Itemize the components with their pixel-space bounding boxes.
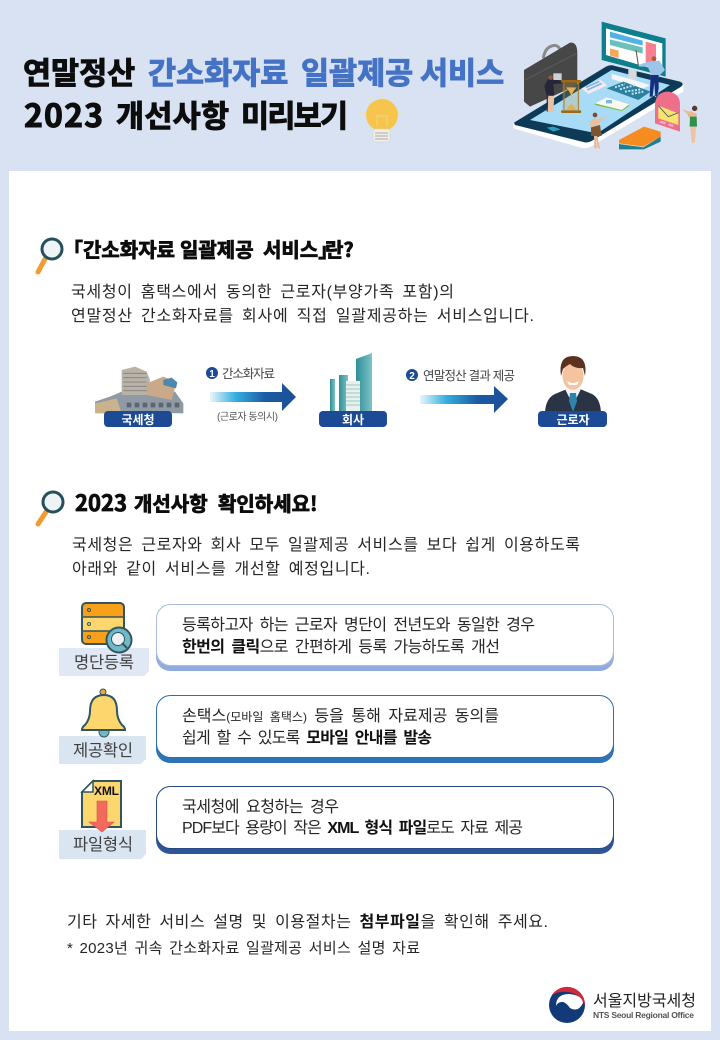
footer note [67, 913, 548, 957]
intro text 2: 아래와 같이 서비스를 개선할 예정입니다. [72, 560, 370, 578]
monitor [628, 68, 637, 83]
item 1: 명단등록 [59, 603, 614, 676]
title: 서비스 [420, 49, 504, 93]
hourglass [562, 83, 580, 112]
description card: PDF보다 용량이 작은 XML 형식 파일로도 자료 제공 [182, 819, 523, 837]
tablet [513, 67, 683, 148]
description card: 한번의 클릭으로 간편하게 등록 가능하도록 개선 [182, 638, 500, 656]
logo: Seoul Regional Office: NTS Seoul Regional Office [593, 1010, 694, 1020]
briefcase [543, 45, 561, 58]
consent note: (근로자 동의시) [217, 411, 278, 423]
books [619, 127, 661, 147]
section heading 1 [38, 234, 354, 272]
description card: 쉽게 할 수 있도록 모바일 안내를 발송 [182, 729, 432, 747]
title: 일괄제공 [301, 49, 413, 93]
papers [582, 79, 607, 94]
item 2: 제공확인 [59, 689, 614, 764]
step 2 label: 연말정산 결과 제공 [423, 369, 515, 383]
heading text: 서비스」 [263, 234, 338, 263]
arrow 2 [420, 386, 508, 413]
label tag [59, 736, 146, 764]
label tag: 제공확인 [73, 741, 133, 760]
person: 근로자 [545, 356, 601, 412]
intro text 1 [71, 283, 534, 325]
heading text: 일괄제공 [180, 234, 254, 263]
arrow 1 [210, 383, 296, 411]
step 1 label: 1 [209, 369, 215, 380]
title: 간소화자료 [148, 49, 288, 93]
woman at right [692, 106, 697, 111]
icon: magnifier [38, 239, 62, 272]
description card [156, 604, 614, 671]
tag: 근로자: 근로자 [556, 413, 590, 427]
heading text: 확인하세요! [218, 488, 317, 517]
illustration: tablet, monitor and office items [513, 22, 697, 149]
heading text: 개선사항 [134, 488, 208, 517]
icon: magnifier [38, 492, 63, 524]
footer note: * 2023년 귀속 간소화자료 일괄제공 서비스 설명 자료 [67, 940, 420, 957]
heading text: 2023 [75, 486, 127, 518]
woman at bottom [593, 113, 597, 117]
icon: XML file with arrow [82, 781, 121, 832]
title: 개선사항 [116, 92, 229, 136]
heading text: 란? [325, 234, 354, 263]
tag: 국세청 [104, 411, 172, 427]
footer note: 기타 자세한 서비스 설명 및 이용절차는 첨부파일을 확인해 주세요. [67, 913, 548, 931]
logo: Seoul Regional Office: 서울지방국세청 [593, 992, 696, 1010]
label tag: 명단등록 [74, 653, 134, 672]
emblem [549, 987, 585, 1023]
label tag [59, 648, 149, 676]
man with pointer [636, 50, 638, 65]
tag: 회사: 회사 [342, 413, 364, 427]
label tag [59, 830, 146, 859]
title: 2023 [24, 91, 103, 137]
item 3: 파일형식 [59, 781, 614, 859]
icon: database with magnifier [82, 603, 132, 652]
intro text 2 [72, 536, 580, 578]
step 2 label: 2 [409, 371, 415, 382]
intro text 2: 국세청은 근로자와 회사 모두 일괄제공 서비스를 보다 쉽게 이용하도록 [72, 536, 580, 554]
flow diagram [95, 353, 607, 427]
description card: 등록하고자 하는 근로자 명단이 전년도와 동일한 경우 [182, 616, 535, 634]
title: 연말정산 [23, 49, 135, 93]
book [595, 97, 629, 110]
tag: 회사 [319, 411, 387, 427]
tag: 근로자 [538, 411, 607, 427]
title: 미리보기 [241, 92, 348, 136]
pink clock [655, 92, 680, 132]
step 1 label: 간소화자료 [222, 367, 275, 381]
description card [156, 786, 614, 854]
logo: Seoul Regional Office [549, 987, 696, 1023]
label tag: 파일형식 [73, 835, 133, 854]
woman at briefcase [544, 78, 563, 112]
building: 국세청 [95, 367, 183, 413]
tag: 국세청: 국세청 [121, 412, 155, 427]
icon: bell [82, 689, 125, 737]
icon: light bulb [360, 93, 404, 142]
description card: 국세청에 요청하는 경우 [182, 798, 339, 816]
icon: XML file with arrow: XML [94, 784, 119, 798]
heading text: 「간소화자료 [63, 234, 175, 263]
building: 회사 [330, 353, 372, 411]
keyboard [607, 82, 651, 100]
intro text 1: 국세청이 홈택스에서 동의한 근로자(부양가족 포함)의 [71, 283, 454, 301]
description card: 손택스(모바일 홈택스) 등을 통해 자료제공 동의를 [182, 707, 499, 725]
description card [156, 696, 614, 763]
title [23, 49, 504, 137]
intro text 1: 연말정산 간소화자료를 회사에 직접 일괄제공하는 서비스입니다. [71, 307, 534, 325]
section heading 2 [38, 486, 317, 524]
